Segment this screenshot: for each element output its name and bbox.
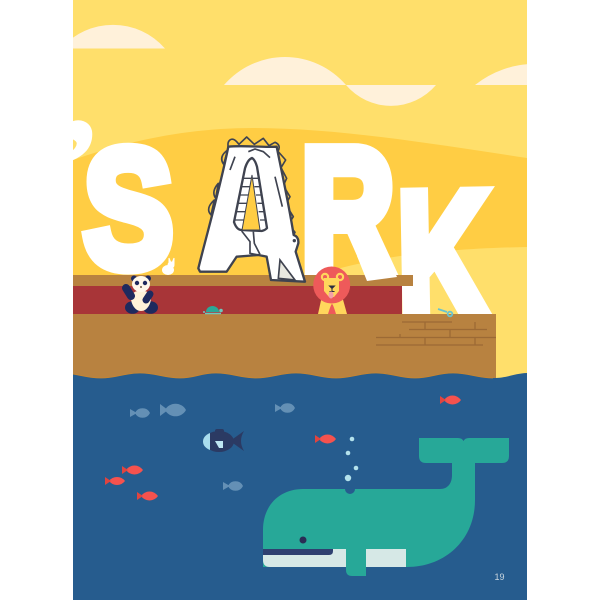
clouds [73,24,527,106]
lizard [438,309,452,316]
whale blowhole [345,489,355,494]
croc teeth rungs [235,178,266,220]
lion tail gap [328,304,336,314]
croc mouth teeth band [234,158,267,231]
lion ears [321,273,329,281]
whale body and tail [263,438,509,567]
whale mouth line [263,549,333,555]
letter A glyph: A [205,137,295,301]
hull brick lines [376,322,496,345]
ark upper beam [73,275,413,286]
croc eye [293,239,296,242]
croc jaw teeth [278,260,295,280]
lion mane [313,266,350,304]
croc body [198,146,305,282]
title letters S with apostrophe [73,120,174,275]
page number: 19 [494,572,505,582]
dark fish tail [230,431,244,451]
letter A crocodile [198,137,305,301]
ark red wall [73,286,402,315]
turtle [203,306,223,314]
dark fish face [203,433,210,450]
sea with wavy surface [63,373,530,600]
bubbles [345,437,358,481]
rabbit [162,258,174,275]
whale [263,438,509,576]
sky background [73,0,527,400]
letter S: S [84,115,173,303]
lion nose [330,286,334,292]
dark fish fin [215,429,224,434]
lion body [318,300,347,314]
illustration page [73,0,527,600]
letter K: K [396,154,490,360]
dark fish gill [215,441,223,448]
apostrophe: ’ [56,92,101,241]
whale lower jaw [263,549,406,567]
beam patch behind R foot [300,275,362,286]
panda ears [131,276,137,282]
dark fish body [204,431,234,452]
hills [73,128,527,285]
croc mouth opening [242,175,260,230]
lion face [324,278,339,297]
ark hull [73,314,496,385]
lion tongue [328,292,334,298]
panda legs [125,301,140,314]
pale fish [130,403,295,491]
lion [313,266,350,314]
whale flipper [346,549,366,576]
red fish tails [105,396,446,500]
right foot of R over beam [357,256,397,281]
dark fish [203,429,244,452]
panda head [132,276,150,292]
panda [125,276,158,314]
red fish [105,396,461,500]
page scene [73,0,527,600]
panda arms [126,288,131,296]
red fish bodies [109,396,461,500]
panda eyes and nose [135,281,139,285]
whale eye [300,536,306,544]
croc chin and scales [230,149,282,255]
panda body [131,290,151,311]
letter R: R [301,112,395,313]
croc spikes [209,137,295,238]
